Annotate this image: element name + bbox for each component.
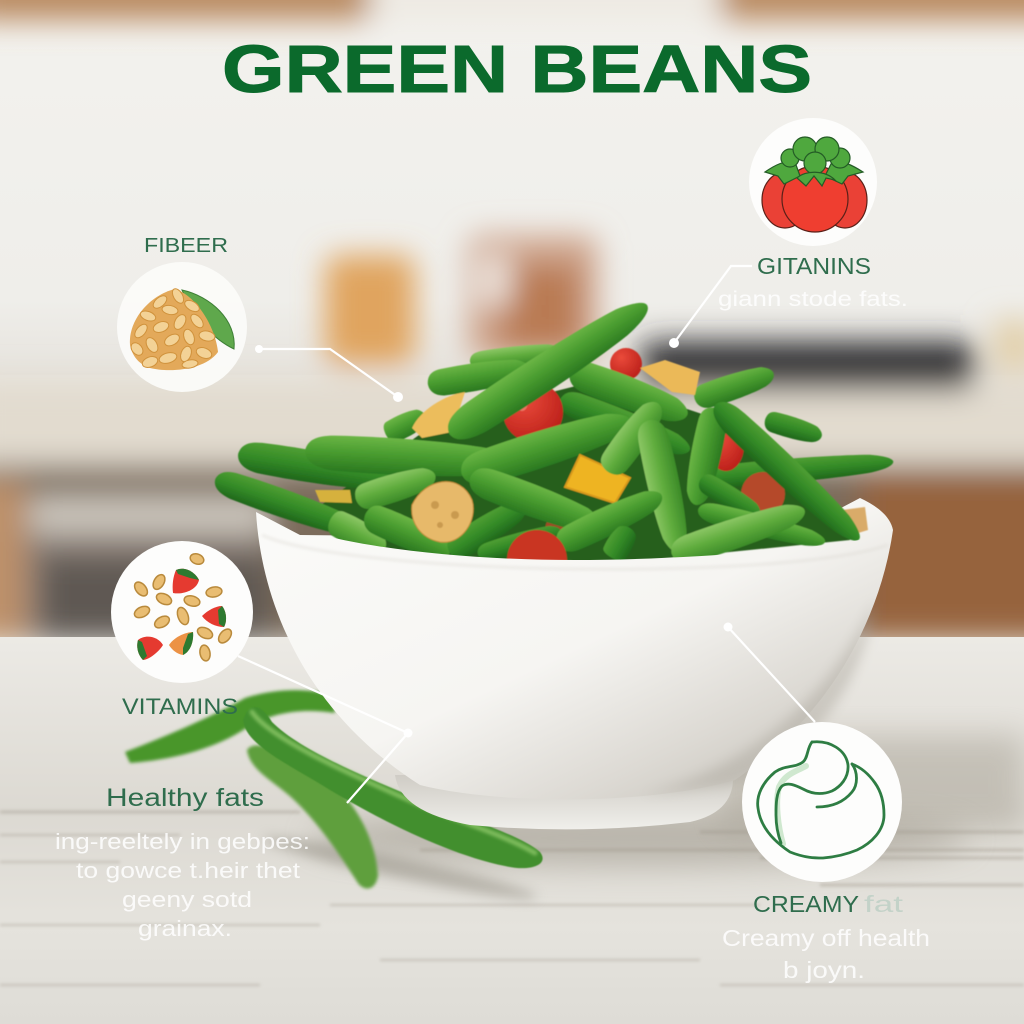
table surface <box>0 637 1024 1024</box>
loose green beans on table <box>125 690 543 907</box>
text: creamy description: Creamy off health <box>722 925 930 951</box>
heading: vitamins: VITAMINS <box>122 694 238 719</box>
heading: vitamins top: GITANINS <box>757 253 871 279</box>
text: healthy fats description <box>55 829 310 941</box>
panel: vitamins <box>111 541 253 719</box>
nuts behind <box>315 360 868 534</box>
icon: tomato <box>762 137 867 232</box>
heading: creamy fat: CREAMY <box>753 891 859 917</box>
icon: seeds and berries <box>132 552 234 662</box>
text: healthy fats description: grainax. <box>138 916 232 941</box>
panel: fiber <box>117 235 247 392</box>
dark interior <box>300 380 850 565</box>
text: creamy description: b joyn. <box>783 957 865 983</box>
text: creamy description <box>722 925 930 983</box>
text: healthy fats description: to gowce t.heir thet <box>76 858 300 883</box>
panel: healthy fats <box>55 784 310 941</box>
panel: tomato <box>718 118 908 311</box>
title: GREEN BEANS <box>222 32 812 107</box>
back beans <box>381 340 894 490</box>
callout leader lines <box>238 266 815 803</box>
heading: creamy fat: fat <box>864 891 904 917</box>
icon: grains and leaf <box>129 287 234 370</box>
heading: healthy fats: Healthy fats <box>106 784 264 812</box>
white bowl <box>256 498 893 829</box>
heading: fiber: FIBEER <box>144 235 228 257</box>
text: healthy fats description: ing-reeltely in gebpes: <box>55 829 310 854</box>
panel: creamy fat <box>722 722 930 983</box>
tomatoes behind <box>545 348 785 547</box>
heading: creamy fat <box>753 891 904 917</box>
front beans <box>211 290 869 590</box>
bean pile <box>214 302 894 560</box>
golden nugget <box>412 482 473 542</box>
text: healthy fats description: geeny sotd <box>122 887 252 912</box>
icon: cream swirl <box>758 742 884 858</box>
yellow chunk <box>565 455 630 503</box>
text: top right description: giann stode fats. <box>718 288 908 311</box>
